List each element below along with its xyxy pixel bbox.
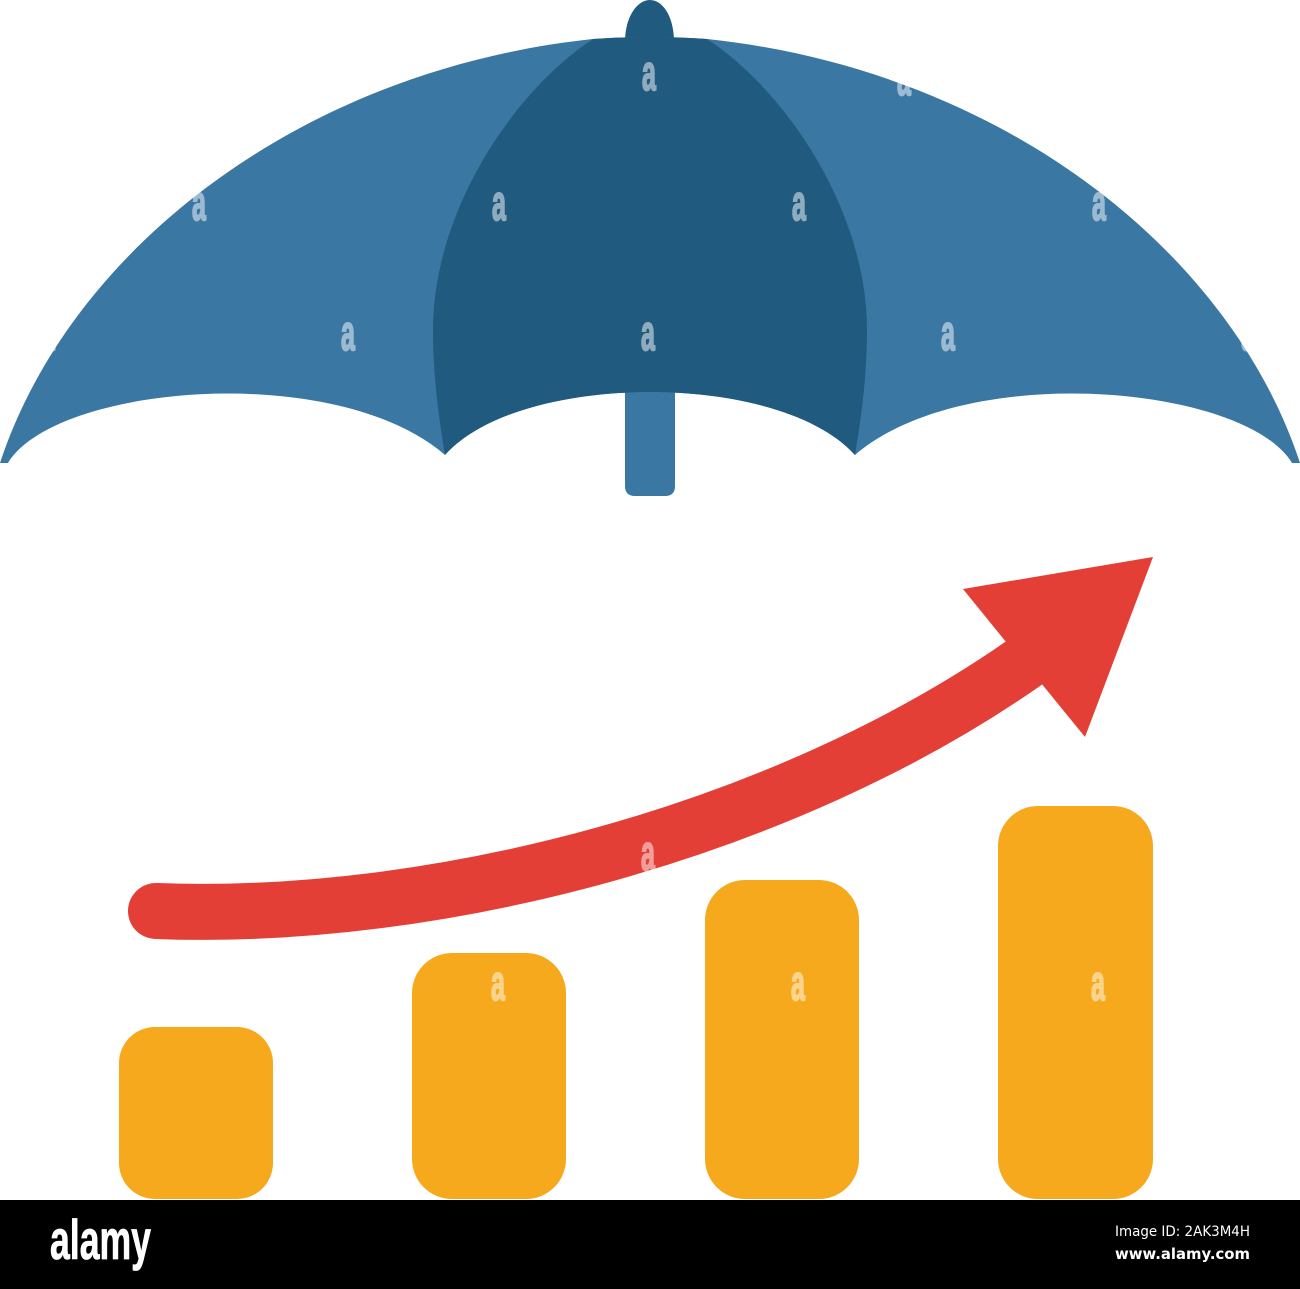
bar 4 bbox=[998, 806, 1153, 1199]
stock watermark glyphs: a bbox=[491, 956, 506, 1011]
stock watermark glyphs: a bbox=[192, 176, 207, 231]
bar 1 bbox=[119, 1027, 273, 1199]
umbrella canopy centre panel bbox=[433, 37, 867, 455]
stock watermark glyphs: a bbox=[642, 46, 657, 101]
image id text: Image ID: 2AK3M4H bbox=[1115, 1224, 1250, 1240]
watermark bar bbox=[0, 1200, 1300, 1289]
website text: www.alamy.com bbox=[1115, 1245, 1250, 1263]
umbrella handle bbox=[625, 385, 675, 496]
umbrella top knob bbox=[625, 0, 674, 42]
bar chart bbox=[119, 806, 1153, 1199]
stock watermark glyphs: a bbox=[41, 306, 56, 361]
umbrella canopy outer panels bbox=[0, 37, 1300, 463]
stock watermark glyphs: a bbox=[341, 306, 356, 361]
stock watermark glyphs: a bbox=[1241, 306, 1256, 361]
arrow head bbox=[963, 557, 1153, 737]
arrow shaft bbox=[156, 663, 1024, 912]
icon: rising red arrow bbox=[156, 557, 1153, 912]
stock watermark glyphs bbox=[41, 46, 1256, 1011]
bar 3 bbox=[705, 880, 859, 1199]
stock watermark glyphs: a bbox=[1092, 176, 1107, 231]
stock watermark glyphs: a bbox=[641, 306, 656, 361]
stock watermark glyphs: a bbox=[791, 956, 806, 1011]
stock watermark glyphs: a bbox=[897, 51, 912, 106]
stock watermark glyphs: a bbox=[641, 826, 656, 881]
stock watermark glyphs: a bbox=[941, 306, 956, 361]
stock watermark glyphs: a bbox=[492, 176, 507, 231]
stock watermark glyphs: a bbox=[792, 176, 807, 231]
stock watermark glyphs: a bbox=[1091, 956, 1106, 1011]
black footer band bbox=[0, 1200, 1300, 1289]
icon: umbrella bbox=[0, 0, 1300, 496]
bar 2 bbox=[412, 953, 566, 1199]
alamy logo text: alamy bbox=[50, 1208, 151, 1271]
